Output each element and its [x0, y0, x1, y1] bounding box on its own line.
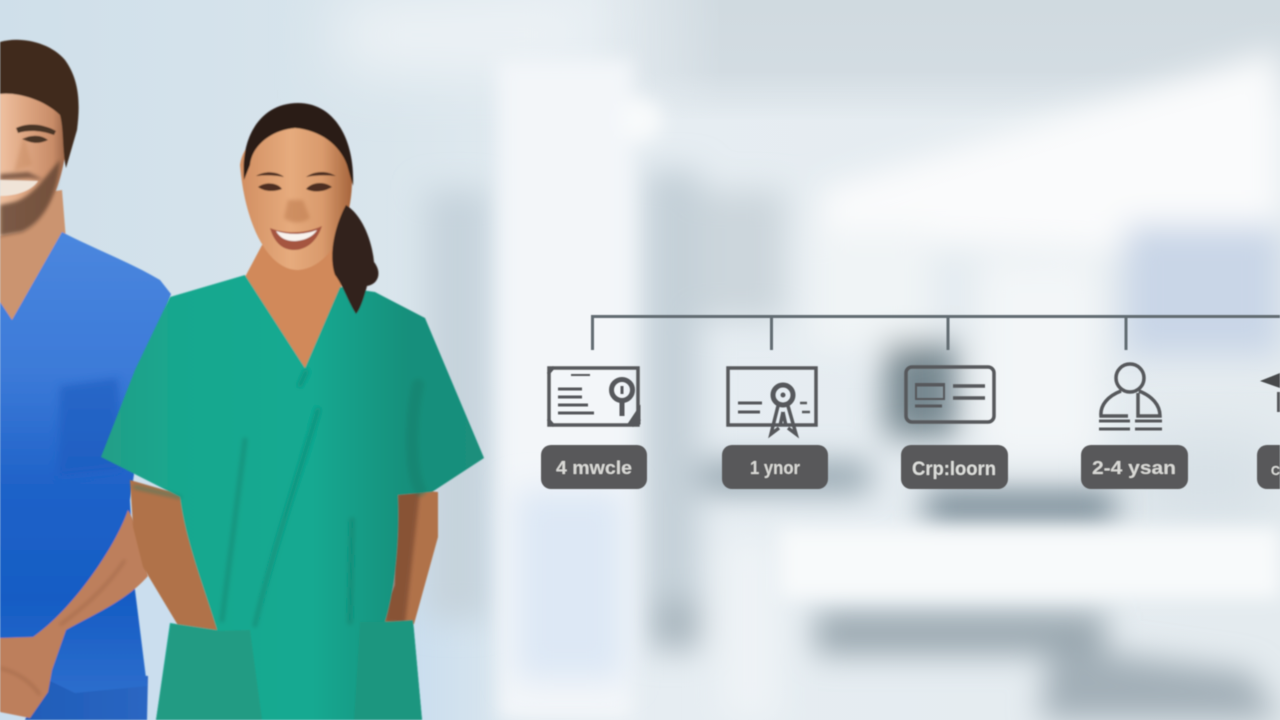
icon: certificate with seal — [548, 367, 640, 426]
female nurse face — [240, 125, 352, 270]
male nurse arm and hands — [0, 510, 148, 718]
person: male nurse in blue scrubs — [0, 40, 171, 720]
label pill: diploma — [901, 445, 1008, 489]
female nurse hair — [244, 103, 353, 186]
male nurse trousers — [25, 668, 148, 720]
female nurse brows and eyes — [256, 172, 336, 191]
male nurse scrub top — [0, 232, 171, 693]
female nurse left pocket — [156, 624, 262, 720]
person: female nurse in green scrubs — [101, 103, 484, 720]
male nurse moustache — [0, 172, 44, 180]
icon: diploma with ribbon — [728, 368, 816, 434]
male nurse hair — [0, 40, 79, 168]
female nurse arm shadow — [385, 490, 420, 625]
label pill: cropped at right edge — [1257, 445, 1280, 489]
female nurse scrub top — [101, 275, 484, 720]
connector tree — [592, 316, 1280, 350]
label pill: 2-4 years: 2-4 ysan — [1092, 458, 1176, 478]
icon: graduation cap, cropped — [1260, 373, 1280, 412]
label pill: 2-4 years — [1081, 445, 1188, 489]
female nurse smile — [270, 226, 322, 250]
female nurse right pocket — [354, 621, 422, 720]
male nurse smile — [0, 180, 38, 196]
male nurse nose shadow — [14, 135, 32, 172]
male nurse knuckle shading — [0, 560, 125, 695]
female nurse nose shadow — [284, 200, 310, 222]
male nurse beard — [0, 160, 60, 236]
female nurse neck — [245, 245, 342, 370]
female nurse ponytail — [332, 205, 378, 314]
label pill: 1 year: 1 ynor — [750, 458, 800, 478]
male nurse chest pocket — [58, 378, 122, 476]
label pill: 4 months — [541, 445, 647, 489]
icon: ID card — [906, 367, 994, 422]
icon: person with lines — [1099, 364, 1162, 429]
female nurse folds — [135, 372, 420, 625]
male nurse neck — [0, 190, 66, 322]
label pill: 4 months: 4 mwcle — [556, 458, 632, 478]
label pill: diploma: Crp:loorn — [912, 459, 996, 480]
female nurse arms — [130, 480, 438, 632]
male nurse face — [0, 88, 66, 236]
male nurse brow and eye — [16, 124, 56, 143]
label pill: 1 year — [722, 445, 828, 489]
